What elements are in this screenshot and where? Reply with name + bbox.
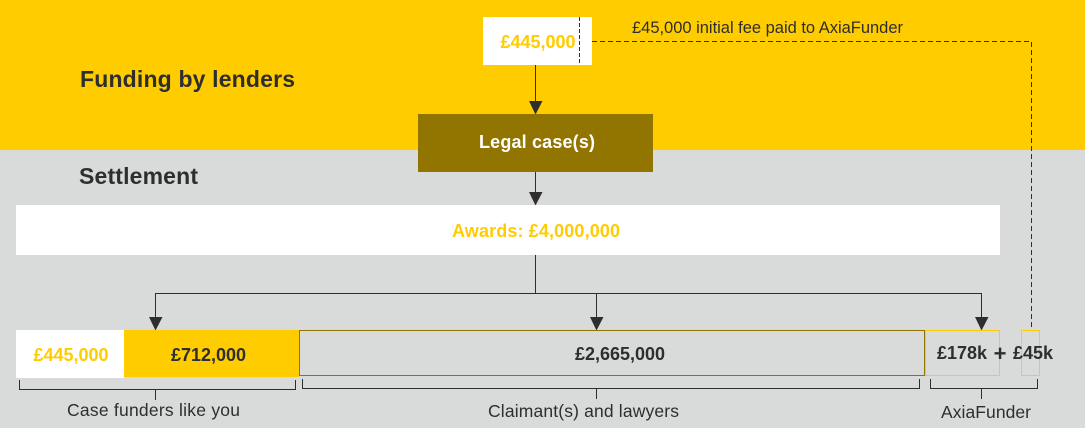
bar segment: case funder profit: £712,000	[171, 345, 246, 365]
box: legal cases	[418, 114, 653, 172]
arrows: awards split to three recipients	[149, 255, 988, 330]
text: plus sign: +	[994, 341, 1006, 366]
bar segment: returned capital: £445,000	[33, 345, 109, 365]
box: awards: Awards: £4,000,000	[452, 221, 620, 241]
box: lender funding amount	[483, 17, 592, 65]
text: fee amount: £45k	[1013, 343, 1054, 363]
label: case funders: Case funders like you	[67, 400, 240, 420]
arrow: legal case to awards	[529, 172, 542, 206]
bar segment: claimants and lawyers	[300, 330, 924, 376]
box: lender funding amount: £445,000	[500, 32, 576, 52]
bar segment: AxiaFunder fee	[1022, 330, 1040, 376]
label: AxiaFunder: AxiaFunder	[941, 402, 1031, 422]
arrow: dashed fee path to AxiaFunder	[592, 42, 1032, 330]
text: initial fee label: £45,000 initial fee paid to AxiaFunder	[632, 19, 904, 37]
arrow: funding to legal case	[529, 65, 542, 114]
bracket: AxiaFunder	[930, 379, 1038, 399]
bracket: claimants and lawyers	[302, 379, 920, 399]
heading: funding by lenders: Funding by lenders	[80, 66, 295, 92]
label: claimants and lawyers: Claimant(s) and lawyers	[488, 401, 679, 421]
bar segment: returned capital	[16, 330, 124, 378]
bar segment: AxiaFunder share	[926, 330, 1000, 376]
bar segment: case funder profit	[124, 330, 299, 377]
text: AxiaFunder amounts: £178k	[937, 343, 988, 363]
box: awards	[16, 205, 1000, 255]
box: legal cases: Legal case(s)	[479, 132, 595, 152]
heading: settlement: Settlement	[79, 163, 198, 189]
panel: funding by lenders	[0, 0, 1085, 150]
bracket: case funders	[20, 380, 296, 400]
bar segment: claimants and lawyers: £2,665,000	[575, 344, 665, 364]
